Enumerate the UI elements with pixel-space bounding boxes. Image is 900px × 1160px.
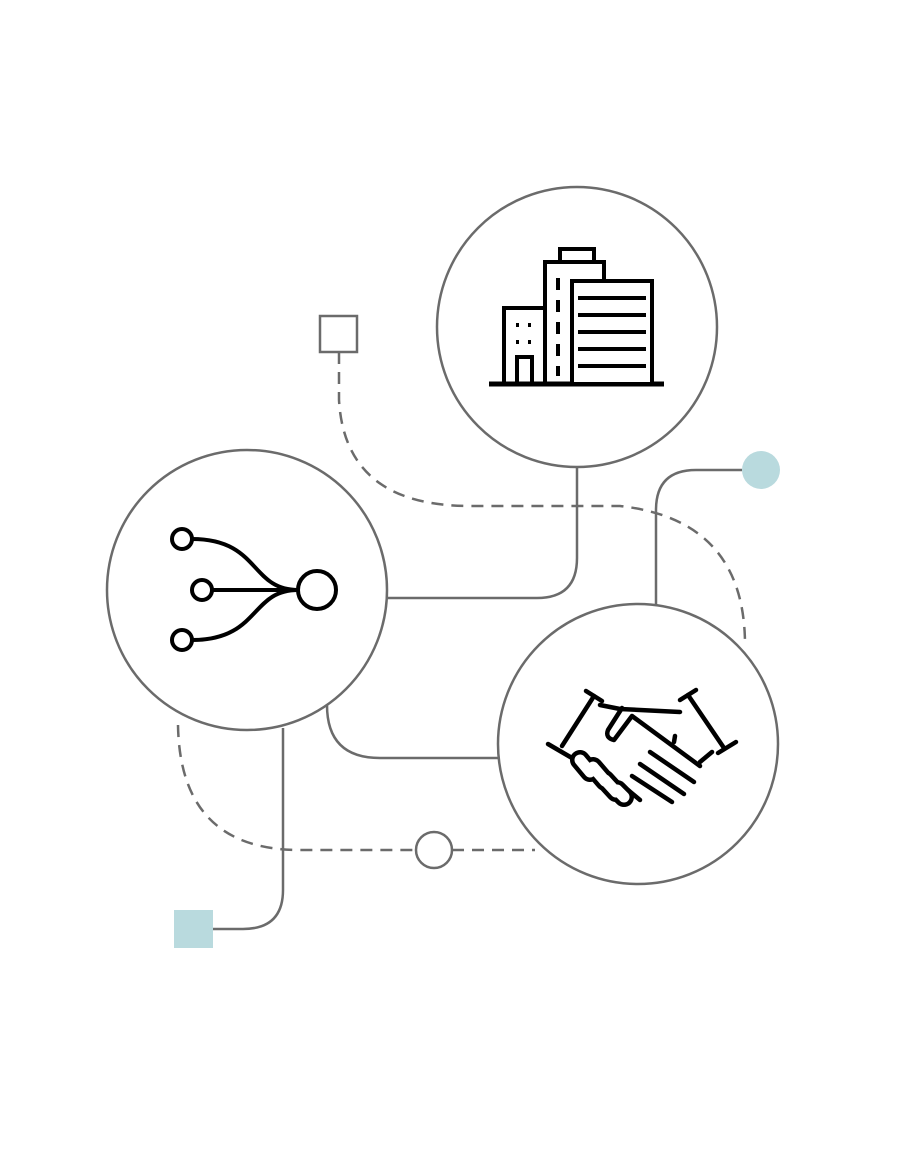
small circle node: [416, 832, 452, 868]
icon: building: [489, 249, 664, 384]
icon: handshake: [548, 690, 736, 802]
icon: merge network: [172, 529, 336, 650]
circle: building: [437, 187, 717, 467]
cyan circle node: [742, 451, 780, 489]
square node outline: [320, 316, 357, 352]
cyan square node: [174, 910, 213, 948]
circle: network: [107, 450, 387, 730]
connector lines: [178, 352, 745, 929]
circle: handshake: [498, 604, 778, 884]
